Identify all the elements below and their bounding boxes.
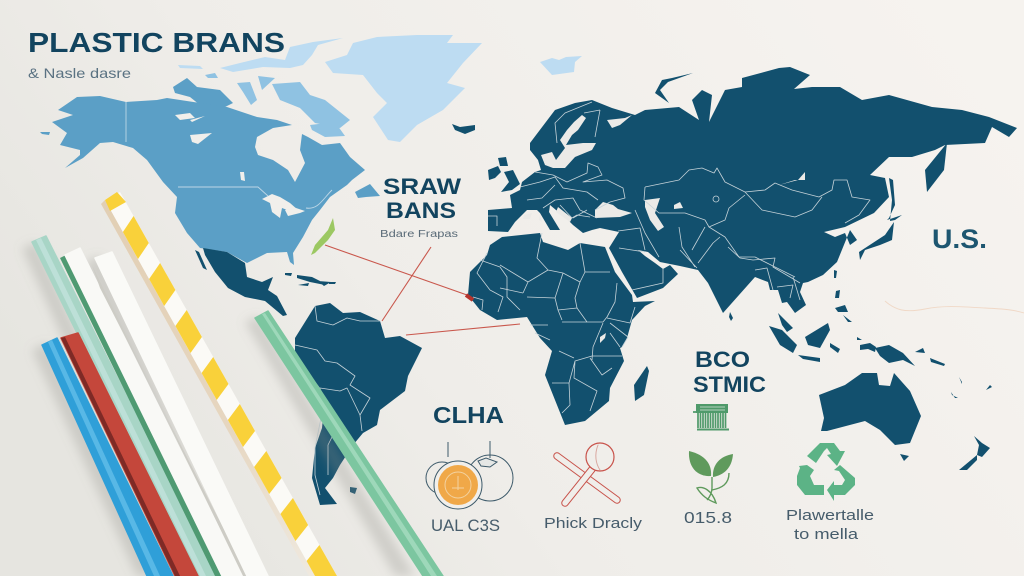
map: Eurasia xyxy=(488,67,1017,313)
label: Plawertalle to mella: to mella xyxy=(794,526,859,543)
label: Phick Dracly: Phick Dracly xyxy=(544,515,643,532)
straw: white one xyxy=(65,248,243,576)
icon: green radiator xyxy=(693,404,729,430)
map: British Isles xyxy=(488,157,520,192)
map: Bermuda highlight xyxy=(311,218,335,255)
straw: green xyxy=(255,311,443,576)
label: BCO STMIC: BCO xyxy=(695,347,750,372)
label: straw bans: Bdare Frapas xyxy=(380,229,458,240)
label: Plawertalle to mella: Plawertalle xyxy=(786,507,874,524)
map: Mexico and Central America xyxy=(195,248,287,316)
map: South East Asia and Oceania islands xyxy=(729,270,992,470)
icon: crossed straw and spoon xyxy=(557,443,617,503)
map: Greenland and high Arctic xyxy=(178,35,582,142)
label: 015.8: 015.8 xyxy=(684,510,732,527)
straws xyxy=(32,192,443,576)
label: BCO STMIC xyxy=(693,347,766,397)
straw: red xyxy=(61,333,198,576)
map: North America lakes and borders xyxy=(126,102,332,218)
map: Novaya Zemlya, Kamchatka, Sakhalin, Japan xyxy=(655,73,947,260)
label: BCO STMIC: STMIC xyxy=(693,372,766,397)
map: Falkland islands xyxy=(350,487,357,494)
label: UAL C3S: UAL C3S xyxy=(431,516,500,535)
straw shadows xyxy=(22,242,415,576)
label: straw bans: BANS xyxy=(386,198,456,223)
map: Iceland xyxy=(452,124,475,134)
map: Caribbean islands xyxy=(285,273,336,286)
title: PLASTIC BRANS xyxy=(28,27,285,58)
map: Africa xyxy=(468,233,655,425)
map: Balkhash marker xyxy=(713,196,719,202)
subtitle: & Nasle dasre xyxy=(28,65,131,81)
label: Plawertalle to mella xyxy=(786,507,874,543)
map: seas and lakes of Eurasia xyxy=(523,115,805,231)
map: Madagascar xyxy=(634,366,649,401)
map: Africa lake and gulf detail xyxy=(600,333,606,343)
icon: orange circles xyxy=(426,441,513,509)
label: CLHA: CLHA xyxy=(433,402,504,428)
label: U.S.: U.S. xyxy=(932,224,987,254)
straw: blue xyxy=(42,338,173,576)
label: straw bans: SRAW xyxy=(383,174,461,199)
map: North America xyxy=(40,78,380,265)
icon: recycle symbol xyxy=(797,443,855,501)
straw: white two xyxy=(95,252,268,576)
connector lines xyxy=(325,245,520,335)
straw: yellow striped xyxy=(101,192,337,576)
world map xyxy=(40,35,1017,505)
map: country borders xyxy=(295,102,870,495)
map: Canadian Arctic islands xyxy=(205,73,350,137)
straw: grey gap xyxy=(92,265,248,576)
straw: mint green xyxy=(32,236,217,576)
icon: green sprout xyxy=(689,451,733,503)
straw: dark green xyxy=(60,254,222,576)
label: straw bans xyxy=(380,174,461,240)
map: South America xyxy=(295,303,422,505)
